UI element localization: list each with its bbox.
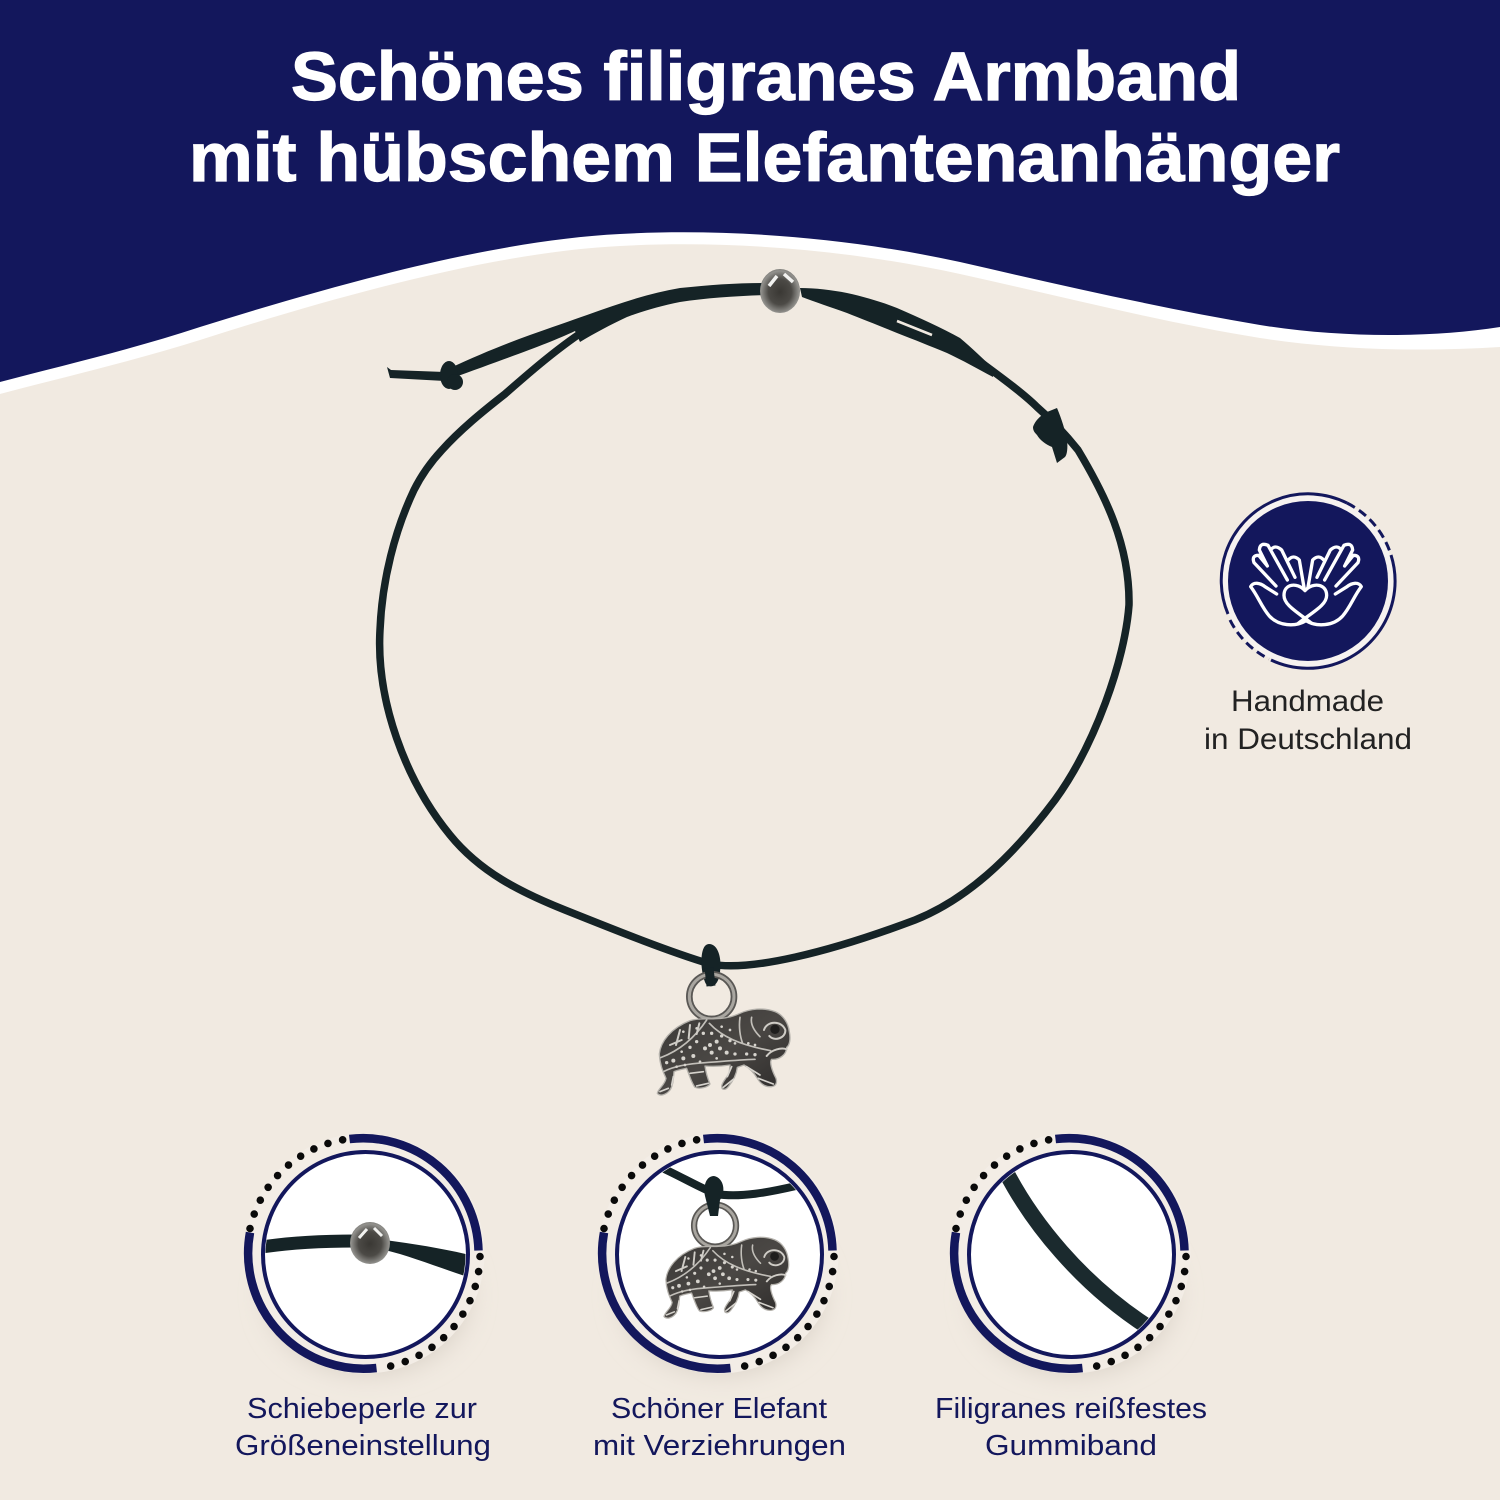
bracelet double strand left	[448, 283, 765, 379]
knot right	[1033, 408, 1067, 463]
inner circle	[969, 1152, 1174, 1357]
detail: elephant on cord	[662, 1168, 796, 1318]
badge label: in Deutschland	[1204, 723, 1412, 756]
badge shadow	[974, 1217, 1174, 1373]
cord tail left	[387, 367, 445, 381]
title: Schönes filigranes Armband	[291, 38, 1241, 115]
feature 1: slider bead	[235, 1134, 491, 1462]
ring decoration	[598, 1134, 838, 1374]
feature 1 label	[235, 1393, 491, 1462]
feature 2 label	[593, 1393, 846, 1462]
header wave: white stripe	[0, 0, 1500, 394]
feature 3 label	[935, 1393, 1207, 1462]
badge outer ring	[1221, 494, 1395, 668]
ring decoration	[950, 1134, 1190, 1374]
feature 1 label: Schiebeperle zur	[247, 1393, 477, 1425]
strand gap highlight	[897, 321, 932, 335]
title	[189, 38, 1340, 196]
detail: cord	[1006, 1172, 1148, 1327]
bracelet photo	[380, 269, 1129, 1095]
badge shadow	[268, 1217, 468, 1373]
badge label: Handmade	[1231, 685, 1384, 718]
knot left	[440, 361, 463, 390]
badge halo	[1222, 495, 1394, 667]
handmade badge	[1204, 494, 1412, 756]
inner circle	[617, 1152, 822, 1357]
bracelet double strand right	[800, 288, 993, 377]
feature 3 label: Gummiband	[985, 1430, 1157, 1462]
title: mit hübschem Elefantenanhänger	[189, 119, 1340, 196]
badge disc	[1228, 501, 1388, 661]
badge label	[1204, 685, 1412, 756]
inner circle	[263, 1152, 468, 1357]
icon: hands with heart	[1251, 544, 1361, 625]
header wave: navy band	[0, 0, 1500, 382]
cord through ring	[709, 968, 711, 986]
slider bead	[760, 269, 800, 313]
feature 3: elastic cord	[935, 1134, 1207, 1462]
feature 2 label: Schöner Elefant	[611, 1393, 827, 1425]
feature 1 label: Größeneinstellung	[235, 1430, 491, 1462]
knot at pendant	[701, 944, 721, 986]
badge shadow	[622, 1217, 822, 1373]
ring decoration	[244, 1134, 484, 1374]
feature 2: elephant	[593, 1134, 846, 1462]
bracelet cord loop	[380, 327, 1129, 966]
detail: cord with bead	[262, 1222, 470, 1277]
feature 3 label: Filigranes reißfestes	[935, 1393, 1207, 1425]
elephant pendant	[657, 974, 790, 1095]
feature 2 label: mit Verziehrungen	[593, 1430, 846, 1462]
